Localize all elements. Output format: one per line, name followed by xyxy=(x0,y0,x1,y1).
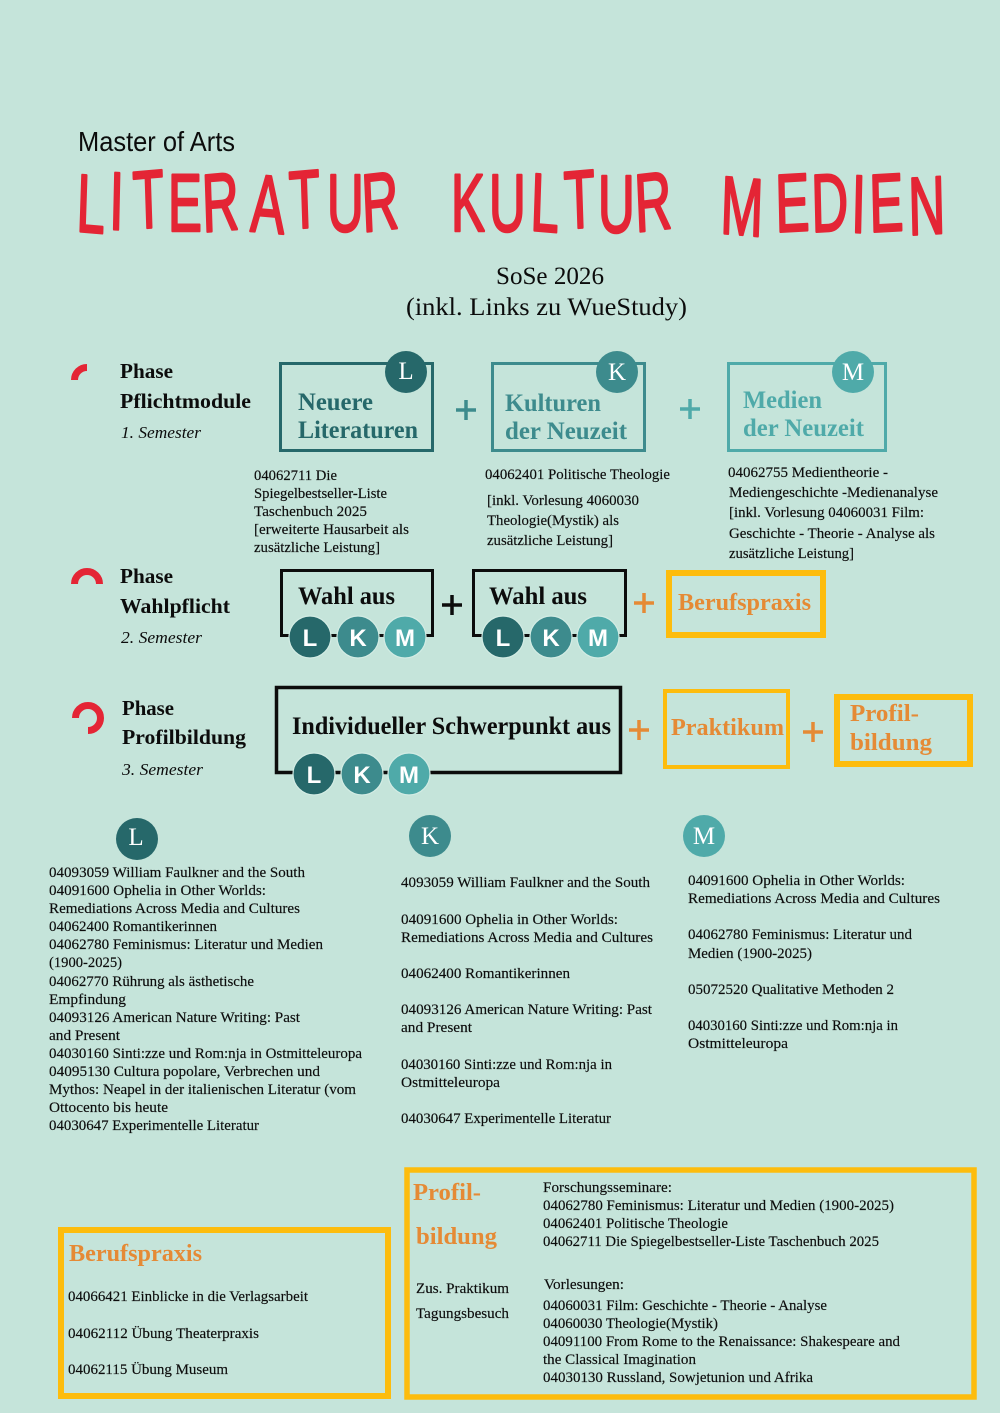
badge: L: L xyxy=(128,824,144,851)
list: Kulturen courses: 4093059 William Faulkner and the South xyxy=(401,875,651,891)
subtitle xyxy=(406,263,687,321)
heading: phase 2: 2. Semester xyxy=(121,628,202,647)
icon: phase 1 progress arc xyxy=(74,368,87,380)
heading: phase 3: Profilbildung xyxy=(122,725,247,749)
panel: Wahl aus 2: Wahl aus xyxy=(489,583,587,610)
panel: Kulturen der Neuzeit: der Neuzeit xyxy=(505,418,628,445)
icon: phase 2 progress arc xyxy=(74,571,100,584)
badge: M xyxy=(683,815,725,857)
icon: plus xyxy=(680,399,700,419)
panel: Praktikum: Praktikum xyxy=(671,715,784,741)
list: Kulturen courses: 04091600 Ophelia in Other Worlds: xyxy=(401,912,618,928)
list: Kulturen courses: Remediations Across Media and Cultures xyxy=(401,930,653,946)
panel: Profilbildung courses: Forschungsseminare: xyxy=(543,1180,672,1196)
list: Kulturen courses xyxy=(401,875,653,1127)
icon: plus xyxy=(634,593,654,613)
list: Kulturen courses: 04030647 Experimentelle Literatur xyxy=(401,1111,611,1127)
text block: Medien course: Geschichte - Theorie - Analyse als xyxy=(729,526,935,542)
panel: Profilbildung courses: Profil- xyxy=(413,1180,481,1206)
text block: Medien course: 04062755 Medientheorie - xyxy=(728,465,888,481)
title: MEDIEN xyxy=(719,157,946,255)
panel: Kulturen der Neuzeit xyxy=(492,351,644,450)
panel: Individueller Schwerpunkt: L xyxy=(307,762,321,789)
list: Literaturen courses: 04091600 Ophelia in Other Worlds: xyxy=(49,883,266,899)
panel: Profilbildung courses: 04062401 Politische Theologie xyxy=(543,1216,728,1232)
text block: Kulturen course: zusätzliche Leistung] xyxy=(487,533,613,549)
heading: phase 1: Phase xyxy=(120,359,173,383)
panel: Wahl aus 2: L xyxy=(496,625,510,652)
panel: Neuere Literaturen: Literaturen xyxy=(298,417,418,444)
list: Medien courses: Ostmitteleuropa xyxy=(688,1036,789,1052)
heading: phase 2 xyxy=(120,564,230,647)
list: Literaturen courses: 04062780 Feminismus: Literatur und Medien xyxy=(49,937,324,953)
panel: Profilbildung courses: 04060031 Film: Geschichte - Theorie - Analyse xyxy=(543,1298,827,1314)
panel: Kulturen der Neuzeit: K xyxy=(608,359,626,386)
heading: phase 2: Wahlpflicht xyxy=(120,594,230,618)
panel: Berufspraxis courses xyxy=(61,1230,388,1396)
title: KULTUR xyxy=(451,153,673,250)
text block: Kulturen course xyxy=(485,467,670,549)
panel: Individueller Schwerpunkt: Individueller Schwerpunkt aus xyxy=(292,713,611,740)
list: Literaturen courses: 04030160 Sinti:zze und Rom:nja in Ostmitteleuropa xyxy=(49,1046,363,1062)
icon: plus xyxy=(629,720,649,740)
panel: Praktikum xyxy=(665,691,788,767)
heading: phase 3: 3. Semester xyxy=(121,760,203,779)
panel: Wahl aus 1: L xyxy=(303,625,317,652)
panel: Profilbildung xyxy=(837,697,970,764)
list: Kulturen courses: and Present xyxy=(401,1020,472,1036)
panel: Wahl aus 1: M xyxy=(395,625,415,652)
heading: phase 3: Phase xyxy=(122,696,174,720)
list: Literaturen courses: and Present xyxy=(49,1028,120,1044)
panel: Profilbildung courses: 04091100 From Rome to the Renaissance: Shakespeare and xyxy=(543,1334,901,1350)
title xyxy=(75,153,946,255)
panel: Profilbildung courses: 04060030 Theologie(Mystik) xyxy=(543,1316,718,1332)
subtitle: SoSe 2026 xyxy=(496,263,604,290)
badge: K: K xyxy=(421,823,439,850)
panel: Individueller Schwerpunkt: K xyxy=(353,762,371,789)
list: Literaturen courses: 04095130 Cultura popolare, Verbrechen und xyxy=(49,1064,321,1080)
text block: Medien course: zusätzliche Leistung] xyxy=(729,546,854,562)
text block: Kulturen course: 04062401 Politische Theologie xyxy=(485,467,670,483)
list: Medien courses: 04091600 Ophelia in Other Worlds: xyxy=(688,873,905,889)
heading: phase 1: 1. Semester xyxy=(121,423,201,442)
list: Literaturen courses: 04030647 Experimentelle Literatur xyxy=(49,1118,259,1134)
list: Literaturen courses: 04062400 Romantikerinnen xyxy=(49,919,218,935)
panel: Neuere Literaturen: Neuere xyxy=(298,389,373,416)
list: Medien courses xyxy=(688,873,940,1052)
badge: K xyxy=(409,815,451,857)
list: Medien courses: 05072520 Qualitative Methoden 2 xyxy=(688,982,894,998)
panel: Wahl aus 1 xyxy=(282,570,432,658)
panel: Profilbildung courses: bildung xyxy=(416,1224,497,1250)
panel: Profilbildung courses: Tagungsbesuch xyxy=(416,1306,510,1322)
icon: plus xyxy=(803,722,823,742)
subtitle: (inkl. Links zu WueStudy) xyxy=(406,294,687,321)
panel: Berufspraxis courses: Berufspraxis xyxy=(69,1241,202,1267)
list: Kulturen courses: 04062400 Romantikerinnen xyxy=(401,966,571,982)
text block: Neuere Literaturen course xyxy=(254,468,409,556)
text block: Kulturen course: [inkl. Vorlesung 4060030 xyxy=(487,493,639,509)
text block: Medien course: [inkl. Vorlesung 04060031 Film: xyxy=(729,505,924,521)
text block: Neuere Literaturen course: 04062711 Die xyxy=(254,468,337,484)
panel: Medien der Neuzeit: der Neuzeit xyxy=(743,415,865,442)
panel: Wahl aus 1: K xyxy=(349,625,367,652)
list: Literaturen courses: 04062770 Rührung als ästhetische xyxy=(49,974,254,990)
heading: phase 3 xyxy=(121,696,247,779)
heading: phase 1 xyxy=(120,359,251,442)
list: Literaturen courses: Empfindung xyxy=(49,992,126,1008)
list: Literaturen courses: (1900-2025) xyxy=(49,955,122,971)
icon: plus xyxy=(456,400,476,420)
list: Literaturen courses: 04093059 William Faulkner and the South xyxy=(49,865,306,881)
list: Kulturen courses: 04093126 American Nature Writing: Past xyxy=(401,1002,652,1018)
text block: Neuere Literaturen course: Taschenbuch 2025 xyxy=(254,504,367,520)
list: Kulturen courses: Ostmitteleuropa xyxy=(401,1075,501,1091)
panel: Wahl aus 2: K xyxy=(542,625,560,652)
panel: Wahl aus 2 xyxy=(474,570,626,658)
list: Literaturen courses: 04093126 American Nature Writing: Past xyxy=(49,1010,300,1026)
panel: Kulturen der Neuzeit: Kulturen xyxy=(505,390,601,417)
panel: Medien der Neuzeit: Medien xyxy=(743,387,822,414)
list: Medien courses: Medien (1900-2025) xyxy=(688,946,812,962)
heading: phase 2: Phase xyxy=(120,564,173,588)
title: LITERATUR xyxy=(75,153,400,252)
text block: Neuere Literaturen course: [erweiterte Hausarbeit als xyxy=(254,522,409,538)
panel: Berufspraxis xyxy=(669,573,823,635)
panel: Berufspraxis courses: 04062115 Übung Museum xyxy=(68,1361,229,1378)
badge: L xyxy=(116,818,158,860)
panel: Profilbildung courses: 04062711 Die Spiegelbestseller-Liste Taschenbuch 2025 xyxy=(543,1234,879,1250)
list: Literaturen courses: Ottocento bis heute xyxy=(49,1100,168,1116)
panel: Profilbildung courses xyxy=(407,1170,974,1397)
list: Literaturen courses: Mythos: Neapel in der italienischen Literatur (vom xyxy=(49,1082,357,1098)
panel: Berufspraxis courses: 04066421 Einblicke in die Verlagsarbeit xyxy=(68,1289,308,1305)
icon: plus xyxy=(442,595,462,615)
icon: phase 3 progress arc xyxy=(76,706,100,730)
panel: Profilbildung courses: 04062780 Feminismus: Literatur und Medien (1900-2025) xyxy=(543,1198,894,1214)
list: Kulturen courses: 04030160 Sinti:zze und Rom:nja in xyxy=(401,1057,613,1073)
list: Literaturen courses: Remediations Across Media and Cultures xyxy=(49,901,300,917)
panel: Neuere Literaturen xyxy=(280,351,432,450)
panel: Medien der Neuzeit: M xyxy=(842,359,864,386)
list: Medien courses: 04030160 Sinti:zze und Rom:nja in xyxy=(688,1018,899,1034)
panel: Profilbildung courses: Zus. Praktikum xyxy=(416,1281,510,1297)
panel: Berufspraxis courses: 04062112 Übung Theaterpraxis xyxy=(68,1325,259,1342)
list: Medien courses: 04062780 Feminismus: Literatur und xyxy=(688,927,913,943)
heading: phase 1: Pflichtmodule xyxy=(120,389,251,413)
panel: Profilbildung courses: Vorlesungen: xyxy=(544,1277,624,1293)
text block: Neuere Literaturen course: zusätzliche Leistung] xyxy=(254,540,380,556)
panel: Berufspraxis: Berufspraxis xyxy=(678,590,811,616)
panel: Individueller Schwerpunkt xyxy=(276,688,620,795)
panel: Wahl aus 2: M xyxy=(588,625,608,652)
list: Literaturen courses xyxy=(49,865,363,1134)
panel: Profilbildung: bildung xyxy=(850,730,932,756)
text block: Medien course xyxy=(728,465,938,562)
overline: Master of Arts: Master of Arts xyxy=(78,126,235,157)
panel: Profilbildung: Profil- xyxy=(850,701,919,727)
panel: Medien der Neuzeit xyxy=(728,351,886,450)
text block: Neuere Literaturen course: Spiegelbestseller-Liste xyxy=(254,486,387,502)
panel: Individueller Schwerpunkt: M xyxy=(399,762,419,789)
text block: Medien course: Mediengeschichte -Medienanalyse xyxy=(729,485,938,501)
panel: Profilbildung courses: 04030130 Russland, Sowjetunion und Afrika xyxy=(543,1370,814,1386)
badge: M: M xyxy=(693,823,715,850)
panel: Wahl aus 1: Wahl aus xyxy=(298,583,395,610)
list: Medien courses: Remediations Across Media and Cultures xyxy=(688,891,940,907)
panel: Profilbildung courses: the Classical Imagination xyxy=(543,1352,697,1368)
text block: Kulturen course: Theologie(Mystik) als xyxy=(487,513,619,529)
panel: Neuere Literaturen: L xyxy=(398,358,414,385)
